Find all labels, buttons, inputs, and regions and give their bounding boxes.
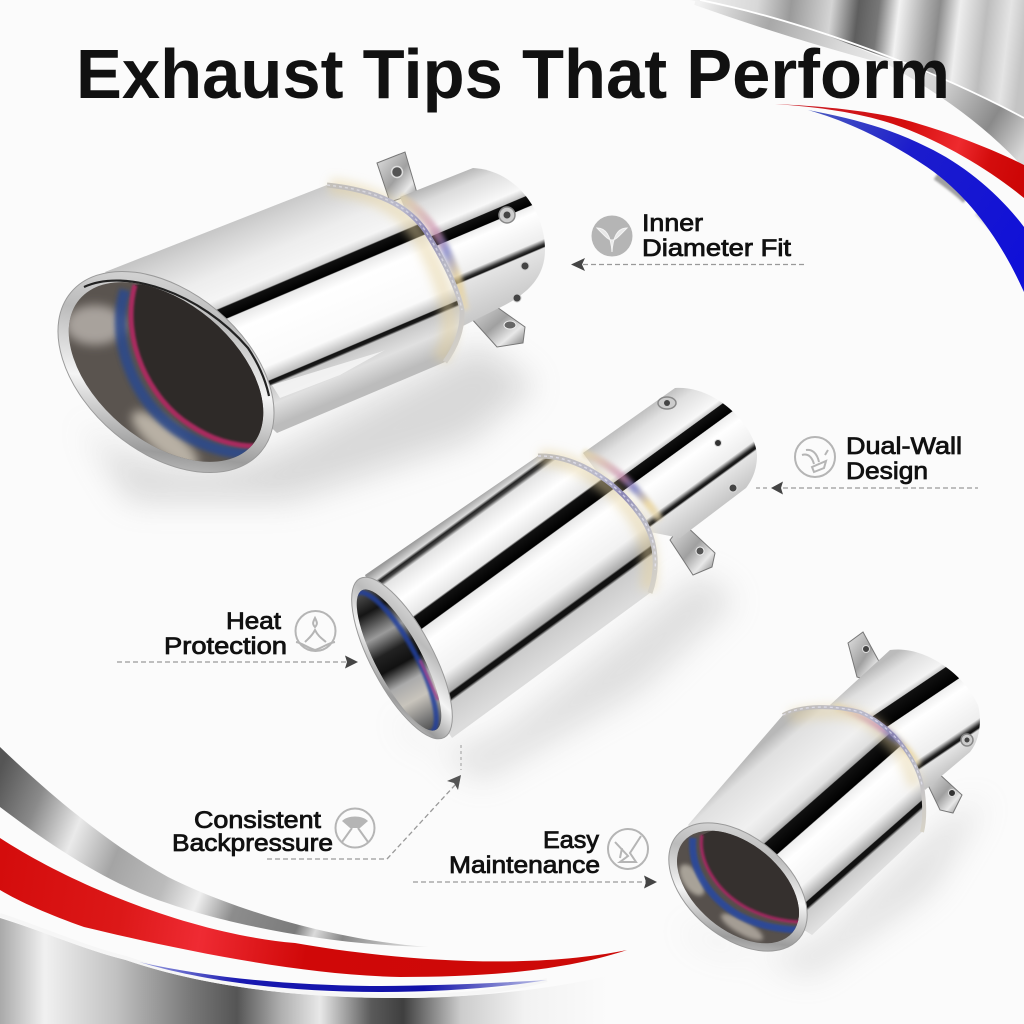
- label text: Protection: [164, 633, 287, 660]
- label text: [164, 608, 287, 660]
- leader arrow: [756, 482, 978, 494]
- label text: Backpressure: [172, 830, 333, 857]
- rim: [20, 231, 312, 513]
- callout: Inner Diameter Fit: [571, 210, 807, 271]
- blue stripe top right: [808, 110, 1024, 292]
- title: Exhaust Tips That Perform: [76, 35, 950, 113]
- label text: Maintenance: [449, 852, 600, 879]
- exhaust tip 3: [668, 631, 980, 952]
- blue stripe bottom: [139, 962, 547, 992]
- label text: [642, 210, 791, 262]
- rim: [645, 797, 831, 977]
- neck: [830, 649, 980, 790]
- red stripe bottom left: [0, 838, 627, 977]
- icon: heat: [296, 611, 336, 651]
- label text: [846, 433, 962, 485]
- weld: [327, 185, 465, 362]
- label text: Dual-Wall: [846, 433, 962, 460]
- decorative swoosh: bottom left: [0, 747, 640, 1024]
- neck holes: [658, 397, 737, 492]
- chrome panel top right: [690, 0, 1024, 122]
- body: [688, 707, 924, 935]
- neck: [583, 388, 757, 538]
- callout: Easy Maintenance: [413, 827, 657, 888]
- icon: inner diameter: [592, 216, 632, 256]
- neck holes: [499, 207, 529, 302]
- rim: [332, 564, 472, 752]
- chrome floor: [0, 918, 640, 1024]
- leader arrow: [267, 745, 461, 859]
- leader arrow: [413, 876, 657, 888]
- bracket bottom: [470, 300, 525, 347]
- weld: [783, 707, 924, 832]
- bore: [356, 589, 442, 731]
- callout: Dual-Wall Design: [756, 433, 978, 494]
- label text: Heat: [226, 608, 281, 635]
- reflection: [272, 350, 385, 398]
- soft shadows under tips: [75, 345, 985, 975]
- label text: Easy: [543, 827, 599, 854]
- callout: Heat Protection: [117, 608, 358, 668]
- bracket: [670, 523, 715, 575]
- leader arrow: [117, 656, 358, 668]
- icon: maintenance: [608, 829, 648, 869]
- bracket bottom: [927, 772, 962, 813]
- exhaust tip 2: [332, 388, 757, 752]
- body: [365, 456, 655, 738]
- weld: [538, 453, 660, 593]
- label text: [172, 807, 333, 857]
- label text: Consistent: [194, 807, 321, 834]
- label text: [449, 827, 600, 879]
- grey fragment beside blue: [936, 176, 994, 228]
- icon: backpressure: [336, 808, 374, 848]
- chrome band: [0, 747, 429, 947]
- body: [105, 185, 462, 433]
- exhaust tip 1: [58, 151, 545, 473]
- bracket top: [377, 152, 417, 202]
- bracket top: [848, 632, 882, 682]
- label text: Diameter Fit: [642, 235, 791, 262]
- bore: [68, 282, 264, 462]
- label text: Design: [846, 458, 928, 485]
- label text: Inner: [642, 210, 703, 237]
- red stripe top right: [775, 104, 1024, 198]
- neck hole: [961, 734, 973, 746]
- bore: [677, 830, 799, 944]
- leader arrow: [571, 258, 807, 271]
- decorative swoosh: top right: [690, 0, 1024, 292]
- icon: dual wall: [795, 437, 835, 477]
- neck: [400, 168, 545, 330]
- callout: Consistent Backpressure: [172, 745, 461, 859]
